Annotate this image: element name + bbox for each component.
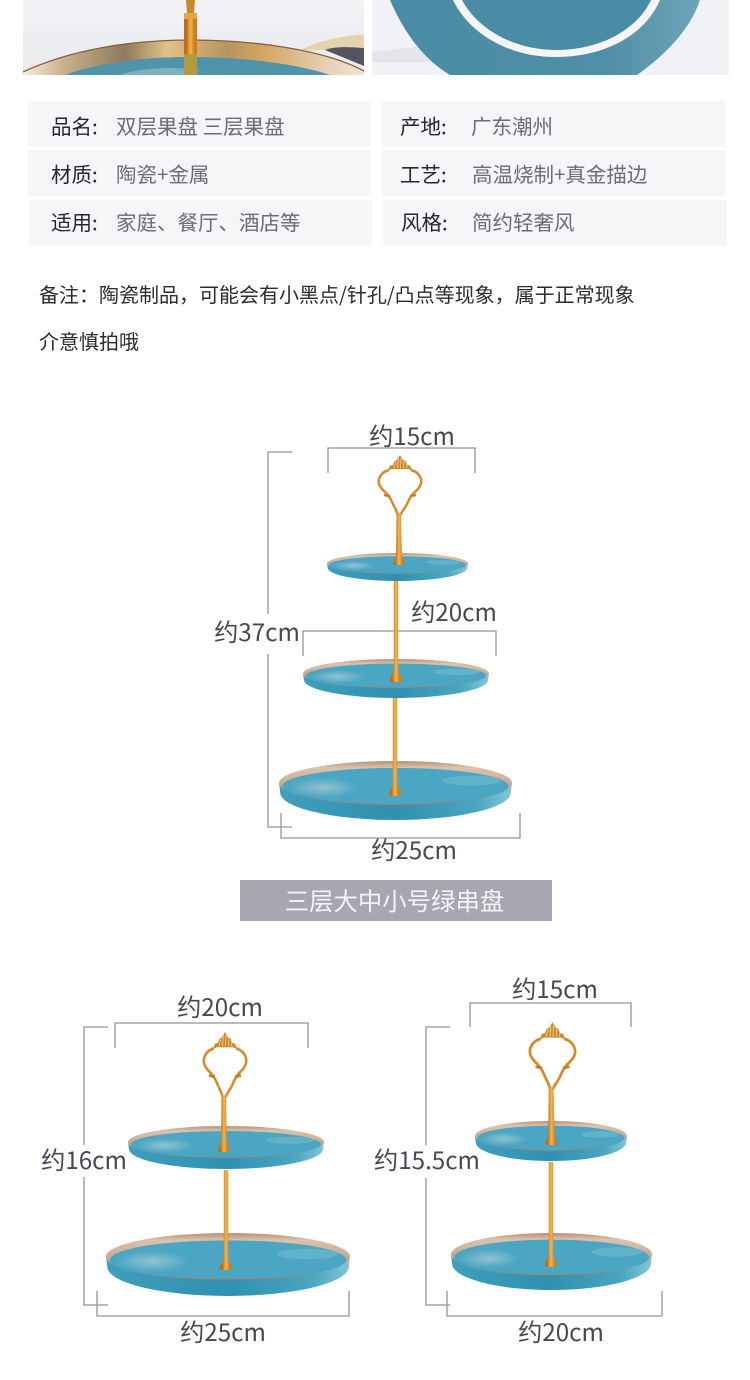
crown handle [204, 1032, 246, 1152]
middle stem [390, 581, 402, 682]
spec label: 工艺: 工艺: [400, 158, 447, 188]
medium plate [303, 659, 489, 698]
label: 约20cm: 约20cm [411, 593, 497, 628]
spec label: 品名: 品名: [51, 110, 98, 140]
diagram: three-tier stand [214, 417, 520, 866]
spec row background: 风格 [383, 200, 727, 246]
label: 约15cm top: 约15cm [512, 970, 598, 1005]
spec label: 风格: 风格: [401, 206, 448, 236]
banner: 三层大中小号绿串盘: 三层大中小号绿串盘 [285, 883, 504, 918]
photo: plate underside close-up [372, 0, 729, 75]
lower plate [451, 1233, 652, 1290]
spec row background: 产地 [382, 101, 726, 147]
lower stem [545, 1162, 557, 1267]
label: 约25cm bottom: 约25cm [180, 1313, 266, 1348]
crown handle [530, 1022, 575, 1145]
label: 约20cm bottom: 约20cm [518, 1313, 604, 1348]
banner: 三层大中小号绿串盘 [240, 880, 552, 921]
crown handle [379, 455, 421, 565]
spec label: 材质: 材质: [51, 158, 98, 188]
spec row background: 适用 [29, 200, 372, 246]
note line 2: 介意慎拍哦 [39, 326, 139, 355]
upper plate [475, 1121, 627, 1161]
label: 约25cm: 约25cm [371, 831, 457, 866]
label: 约20cm top: 约20cm [177, 988, 263, 1023]
dimension lines: two-tier small [426, 1003, 662, 1316]
lower plate [106, 1233, 350, 1296]
label: 约15cm: 约15cm [369, 417, 455, 452]
dimension lines: three-tier [268, 448, 520, 838]
photo: gold rim close-up [23, 0, 364, 75]
lower stem [220, 1170, 232, 1270]
lower stem [389, 698, 401, 796]
dimension lines: two-tier large [84, 1023, 349, 1316]
label: 约16cm: 约16cm [41, 1141, 127, 1176]
diagram: two-tier 20cm and 25cm [41, 988, 350, 1348]
spec row background: 材质 [28, 150, 371, 196]
spec row background: 工艺 [382, 150, 726, 196]
spec value: 品名: 双层果盘 三层果盘 [116, 110, 285, 140]
note line 1: 备注：陶瓷制品，可能会有小黑点/针孔/凸点等现象，属于正常现象 [39, 279, 635, 308]
small plate [327, 553, 468, 581]
spec value: 适用: 家庭、餐厅、酒店等 [116, 206, 300, 236]
label: 约15.5cm: 约15.5cm [374, 1141, 480, 1176]
spec label: 产地: 产地: [400, 110, 447, 140]
label: 约37cm: 约37cm [214, 613, 300, 648]
spec value: 产地: 广东潮州 [471, 110, 553, 140]
diagram: two-tier 15cm and 20cm [374, 970, 662, 1348]
spec value: 工艺: 高温烧制+真金描边 [472, 158, 647, 188]
spec label: 适用: 适用: [51, 206, 98, 236]
upper plate [128, 1126, 324, 1169]
spec value: 风格: 简约轻奢风 [472, 206, 574, 236]
large plate [279, 761, 512, 820]
spec value: 材质: 陶瓷+金属 [116, 158, 209, 188]
spec row background: 品名 [28, 101, 371, 147]
